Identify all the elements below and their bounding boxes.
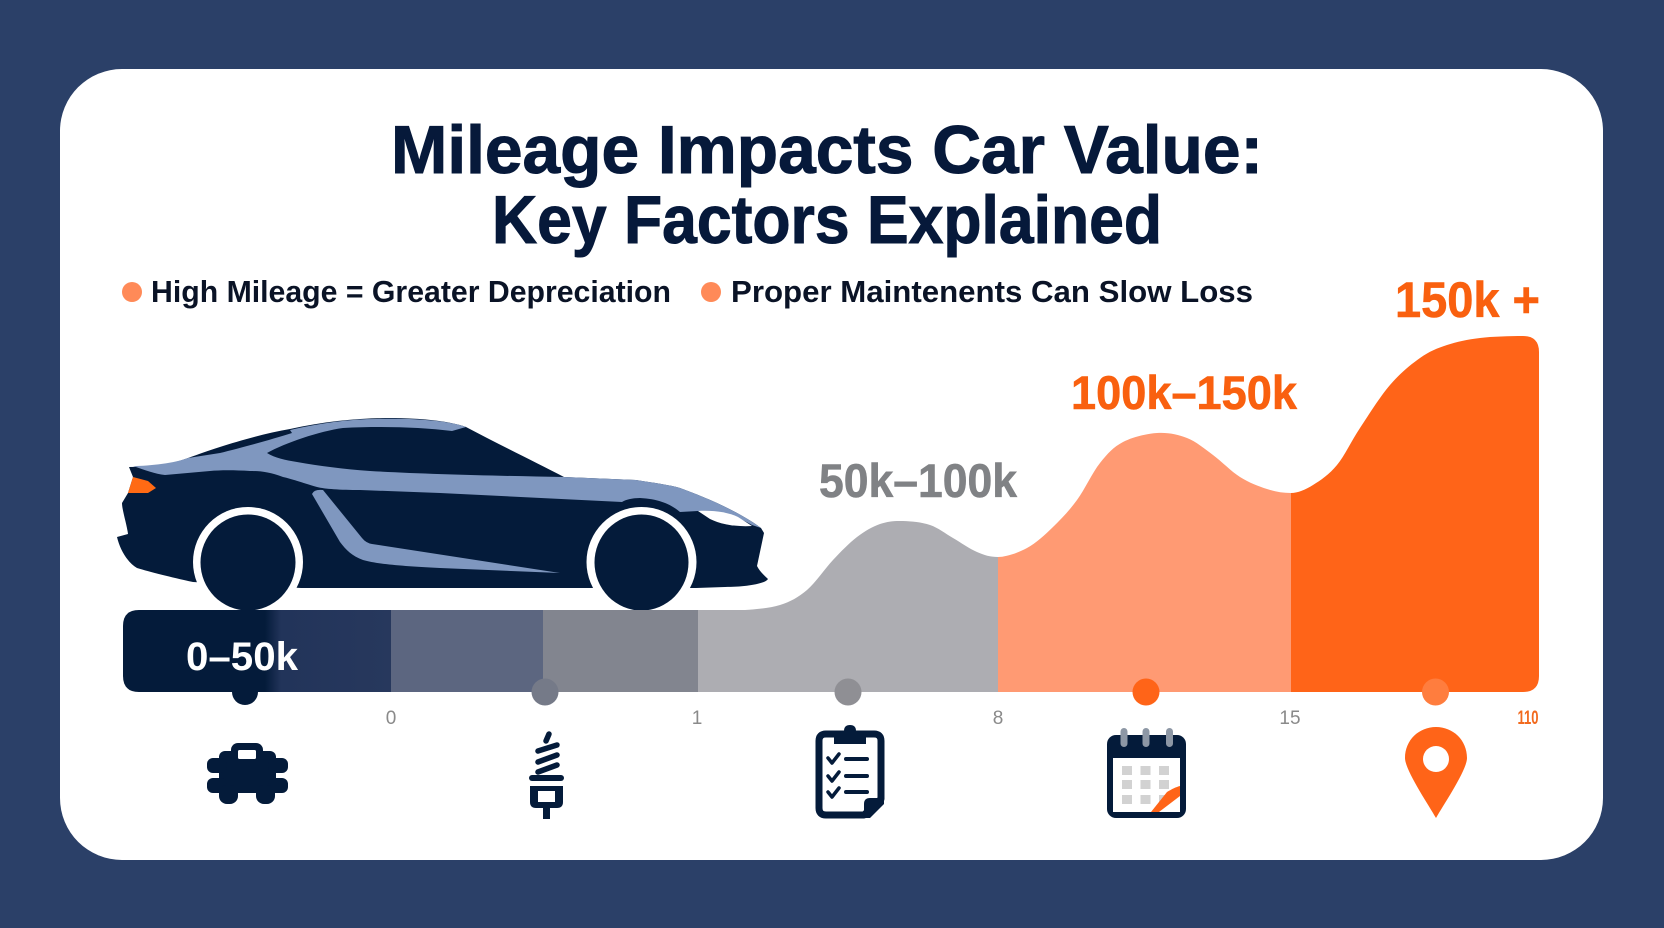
bar segment: 0-50k — [123, 610, 391, 692]
title — [391, 112, 1263, 258]
bar segment 2 — [391, 610, 543, 692]
side swoosh — [312, 490, 560, 573]
segment 150k+ — [1291, 336, 1539, 692]
icon: engine — [207, 743, 288, 804]
bar label: 0-50k: 0–50k — [186, 635, 299, 679]
tick labels: 110 — [1518, 708, 1538, 729]
icon: location pin — [1405, 727, 1467, 818]
segment 50k-100k — [680, 521, 998, 692]
title: Key Factors Explained — [492, 182, 1162, 258]
area chart: mileage bands — [680, 336, 1539, 692]
legend item: high mileage: High Mileage = Greater Depreciation — [151, 274, 671, 309]
icon: calendar — [1107, 728, 1186, 818]
icon: spark plug — [529, 734, 564, 819]
legend — [122, 274, 1253, 309]
car body highlights — [133, 419, 761, 528]
bar segment 3 — [543, 610, 698, 692]
car illustration — [117, 418, 768, 617]
icon: checklist clipboard — [819, 725, 884, 818]
headlight — [698, 511, 752, 526]
legend item: maintenance: Proper Maintenents Can Slow Loss — [731, 274, 1253, 309]
panel: main card — [60, 69, 1603, 860]
tick labels: 15 — [1279, 708, 1301, 729]
tail light — [128, 477, 156, 493]
title: Mileage Impacts Car Value: — [391, 112, 1263, 188]
front wheel — [586, 507, 696, 617]
band label: 50k-100k: 50k–100k — [819, 454, 1018, 507]
band label: 100k-150k: 100k–150k — [1071, 366, 1298, 419]
car body — [117, 418, 768, 588]
mileage bar — [123, 610, 698, 692]
band label: 150k+: 150k + — [1395, 272, 1540, 328]
rear wheel — [193, 507, 303, 617]
tick labels: 0 — [386, 708, 396, 729]
segment 100k-150k — [998, 433, 1291, 692]
tick labels — [386, 708, 1538, 729]
tick labels: 8 — [993, 708, 1003, 729]
timeline dots — [232, 678, 1449, 706]
tick labels: 1 — [692, 708, 702, 729]
